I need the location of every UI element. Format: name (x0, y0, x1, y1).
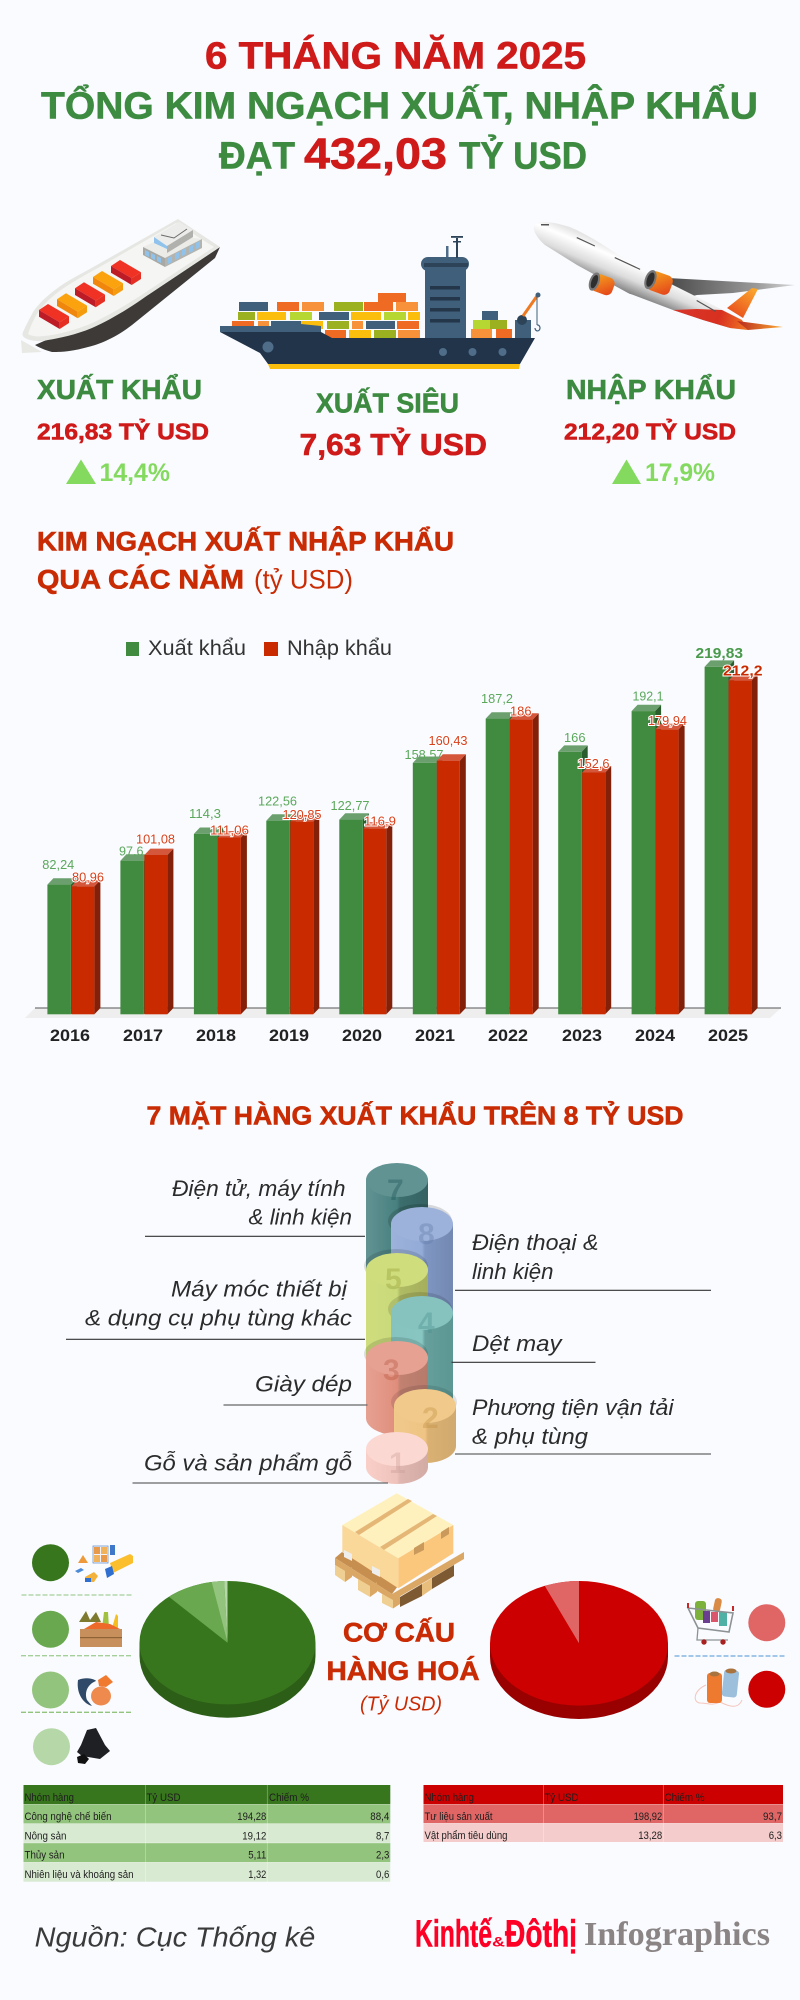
table: export structure: 5,11 (248, 1850, 266, 1862)
title: TỔNG KIM NGẠCH XUẤT, NHẬP KHẨU (41, 82, 758, 128)
title: 6 THÁNG NĂM 2025 (205, 34, 586, 78)
year axis labels: 2018 (196, 1026, 236, 1045)
table: import structure: 13,28 (638, 1830, 662, 1842)
value labels: 192,1 (632, 688, 664, 703)
bars 2024 (632, 705, 685, 1014)
value labels: 80,96 (72, 869, 104, 884)
table: import structure: 6,3 (769, 1830, 782, 1842)
value labels: 158,57 (404, 747, 444, 762)
title: ĐẠT (219, 136, 295, 178)
label: machinery (66, 1277, 365, 1339)
year axis labels (50, 1026, 748, 1045)
table: export structure (24, 1785, 390, 1882)
year axis labels: 2020 (342, 1026, 382, 1045)
value labels: 101,08 (136, 832, 175, 847)
stacked cylinders (364, 1163, 457, 1484)
heading: goods structure: HÀNG HOÁ (326, 1655, 480, 1686)
bars 2017 (120, 849, 173, 1014)
export legend dots (32, 1544, 70, 1765)
bars 2021 (413, 754, 466, 1014)
cylinder 4 (388, 1292, 453, 1425)
cylinder 4: 4 (418, 1307, 435, 1340)
stat: trade surplus (300, 388, 487, 462)
value labels: 187,2 (481, 691, 513, 706)
table: export structure: 0,6 (376, 1869, 389, 1881)
value labels: 212,2 (723, 663, 762, 680)
value labels: 179,94 (648, 713, 687, 728)
stat: import: NHẬP KHẨU (566, 374, 736, 405)
bars 2016 (47, 878, 100, 1014)
table: import structure: Nhóm hàng (424, 1792, 474, 1804)
engine: left (586, 271, 616, 297)
icon: container ship (220, 236, 540, 369)
value labels: 160,43 (428, 733, 468, 748)
year axis labels: 2022 (488, 1026, 528, 1045)
table: export structure: Tỷ USD (146, 1792, 181, 1804)
cylinder 7: 7 (387, 1174, 404, 1207)
label: vehicles (455, 1395, 711, 1454)
heading: goods structure (326, 1617, 480, 1716)
icon: coal (77, 1728, 110, 1764)
label: electronics: Điện tử, máy tính (172, 1176, 346, 1201)
icon: airplane (534, 222, 795, 330)
table: export structure: Nhóm hàng (24, 1792, 74, 1804)
heading: trade by year: QUA CÁC NĂM (37, 564, 244, 594)
engine: right (642, 268, 675, 297)
stat: export: XUẤT KHẨU (37, 374, 202, 405)
stat: import (564, 374, 736, 487)
cylinder 5: 5 (385, 1263, 402, 1296)
table: export structure: 8,7 (376, 1830, 389, 1842)
table: import structure: 198,92 (634, 1811, 662, 1823)
table: import structure (424, 1785, 783, 1842)
value labels: 97,6 (119, 843, 144, 858)
label: wood: Gỗ và sản phẩm gỗ (144, 1451, 352, 1476)
label: footwear: Giày dép (255, 1372, 352, 1397)
bars 2025 (705, 660, 758, 1014)
title (41, 34, 758, 178)
import legend dots (748, 1604, 785, 1708)
bars 2022 (486, 712, 539, 1014)
source note: Nguồn: Cục Thống kê (35, 1922, 315, 1953)
logo: Đôthị (505, 1914, 577, 1956)
table: export structure: 2,3 (376, 1850, 389, 1862)
table: export structure: 1,32 (248, 1869, 266, 1881)
value labels: 111,06 (210, 822, 249, 837)
label: machinery: & dụng cụ phụ tùng khác (85, 1306, 352, 1331)
bars 2019 (266, 814, 319, 1014)
value labels: 152,6 (578, 756, 610, 771)
table: export structure: Nhiên liệu và khoáng sản (24, 1869, 134, 1881)
label: phones: Điện thoại & (472, 1230, 598, 1255)
table: import structure: Tư liệu sản xuất (424, 1811, 492, 1823)
value labels (42, 645, 763, 884)
table: export structure: Chiếm % (269, 1792, 309, 1804)
value labels: 116,9 (364, 813, 396, 828)
label: phones: linh kiện (472, 1259, 554, 1284)
title: TỶ USD (459, 134, 587, 178)
year axis labels: 2023 (562, 1026, 602, 1045)
icon: vegetables crate (79, 1611, 122, 1647)
label: phones (455, 1230, 711, 1290)
heading: goods structure: (Tỷ USD) (360, 1694, 442, 1716)
table: export structure: 19,12 (242, 1830, 266, 1842)
cylinder 8: 8 (418, 1218, 435, 1251)
heading: trade by year (37, 526, 454, 594)
heading: seven export goods: 7 MẶT HÀNG XUẤT KHẨU TRÊN 8 TỶ USD (146, 1100, 684, 1130)
value labels: 82,24 (42, 857, 74, 872)
stat: trade surplus: XUẤT SIÊU (316, 388, 459, 418)
table: import structure: 93,7 (763, 1811, 782, 1823)
year axis labels: 2017 (123, 1026, 163, 1045)
logo (415, 1914, 770, 1956)
stat: export: 216,83 TỶ USD (37, 416, 209, 444)
stat: export (37, 374, 209, 487)
heading: trade by year: KIM NGẠCH XUẤT NHẬP KHẨU (37, 526, 454, 556)
icon: shopping cart (687, 1598, 734, 1645)
icon: boxes on pallet (335, 1493, 464, 1608)
table: export structure: Nông sản (24, 1830, 66, 1842)
logo: Kinhtế (415, 1914, 493, 1956)
heading: goods structure: CƠ CẤU (343, 1617, 455, 1648)
cylinder 3: 3 (383, 1354, 400, 1387)
cylinder 5 (364, 1249, 428, 1375)
stat: trade surplus: 7,63 TỶ USD (300, 427, 487, 462)
label: machinery: Máy móc thiết bị (171, 1277, 348, 1302)
cylinder 2 (391, 1385, 457, 1463)
year axis labels: 2019 (269, 1026, 309, 1045)
label: textiles: Dệt may (472, 1331, 564, 1356)
year axis labels: 2025 (708, 1026, 748, 1045)
logo: & (492, 1934, 505, 1950)
stat: import: 212,20 TỶ USD (564, 416, 736, 444)
cylinder 7 (366, 1163, 428, 1290)
pie chart: export structure (140, 1581, 316, 1718)
icon: export ship from above (21, 219, 220, 353)
value labels: 166 (564, 730, 586, 745)
stat: export: 14,4% (100, 459, 170, 487)
value labels: 186 (510, 704, 532, 719)
icon: processed goods logistics (75, 1545, 133, 1582)
cylinder 1: 1 (389, 1447, 406, 1480)
table: import structure: Tỷ USD (544, 1792, 579, 1804)
label: vehicles: Phương tiện vận tải (472, 1395, 675, 1420)
cylinder 8 (388, 1204, 453, 1340)
label: electronics (145, 1176, 365, 1236)
label: vehicles: & phụ tùng (472, 1424, 589, 1449)
value labels: 114,3 (189, 806, 221, 821)
chart legend: Nhập khẩu (287, 637, 392, 660)
ship bridge (143, 222, 202, 267)
pie chart: import structure (490, 1581, 668, 1719)
table: import structure: Chiếm % (664, 1792, 705, 1804)
year axis labels: 2016 (50, 1026, 90, 1045)
table: export structure: Thủy sản (24, 1850, 64, 1862)
chart legend: Xuất khẩu (148, 637, 246, 660)
containers (39, 260, 141, 329)
heading: trade by year: (tỷ USD) (254, 564, 353, 594)
table: import structure: Vật phẩm tiêu dùng (424, 1830, 508, 1842)
value labels: 122,77 (330, 798, 370, 813)
table: export structure: 88,4 (370, 1811, 389, 1823)
cylinder 2: 2 (422, 1402, 439, 1435)
value labels: 219,83 (696, 645, 743, 662)
cylinder 1 (366, 1432, 428, 1484)
label: electronics: & linh kiện (248, 1205, 352, 1230)
title: 432,03 (304, 130, 447, 178)
bars 2023 (558, 745, 611, 1014)
bars 2020 (339, 813, 392, 1014)
logo: Infographics (584, 1916, 770, 1953)
icon: thread spools (695, 1668, 742, 1706)
year axis labels: 2024 (635, 1026, 676, 1045)
chart legend (126, 637, 392, 660)
year axis labels: 2021 (415, 1026, 455, 1045)
icon: seafood (78, 1675, 113, 1706)
stat: import: 17,9% (645, 459, 715, 487)
table: export structure: 194,28 (237, 1811, 266, 1823)
table: export structure: Công nghệ chế biến (24, 1811, 112, 1823)
cylinder 3 (364, 1337, 428, 1435)
bar chart (25, 645, 781, 1045)
bars 2018 (194, 828, 247, 1014)
value labels: 120,85 (282, 807, 322, 822)
value labels: 122,56 (258, 793, 297, 808)
